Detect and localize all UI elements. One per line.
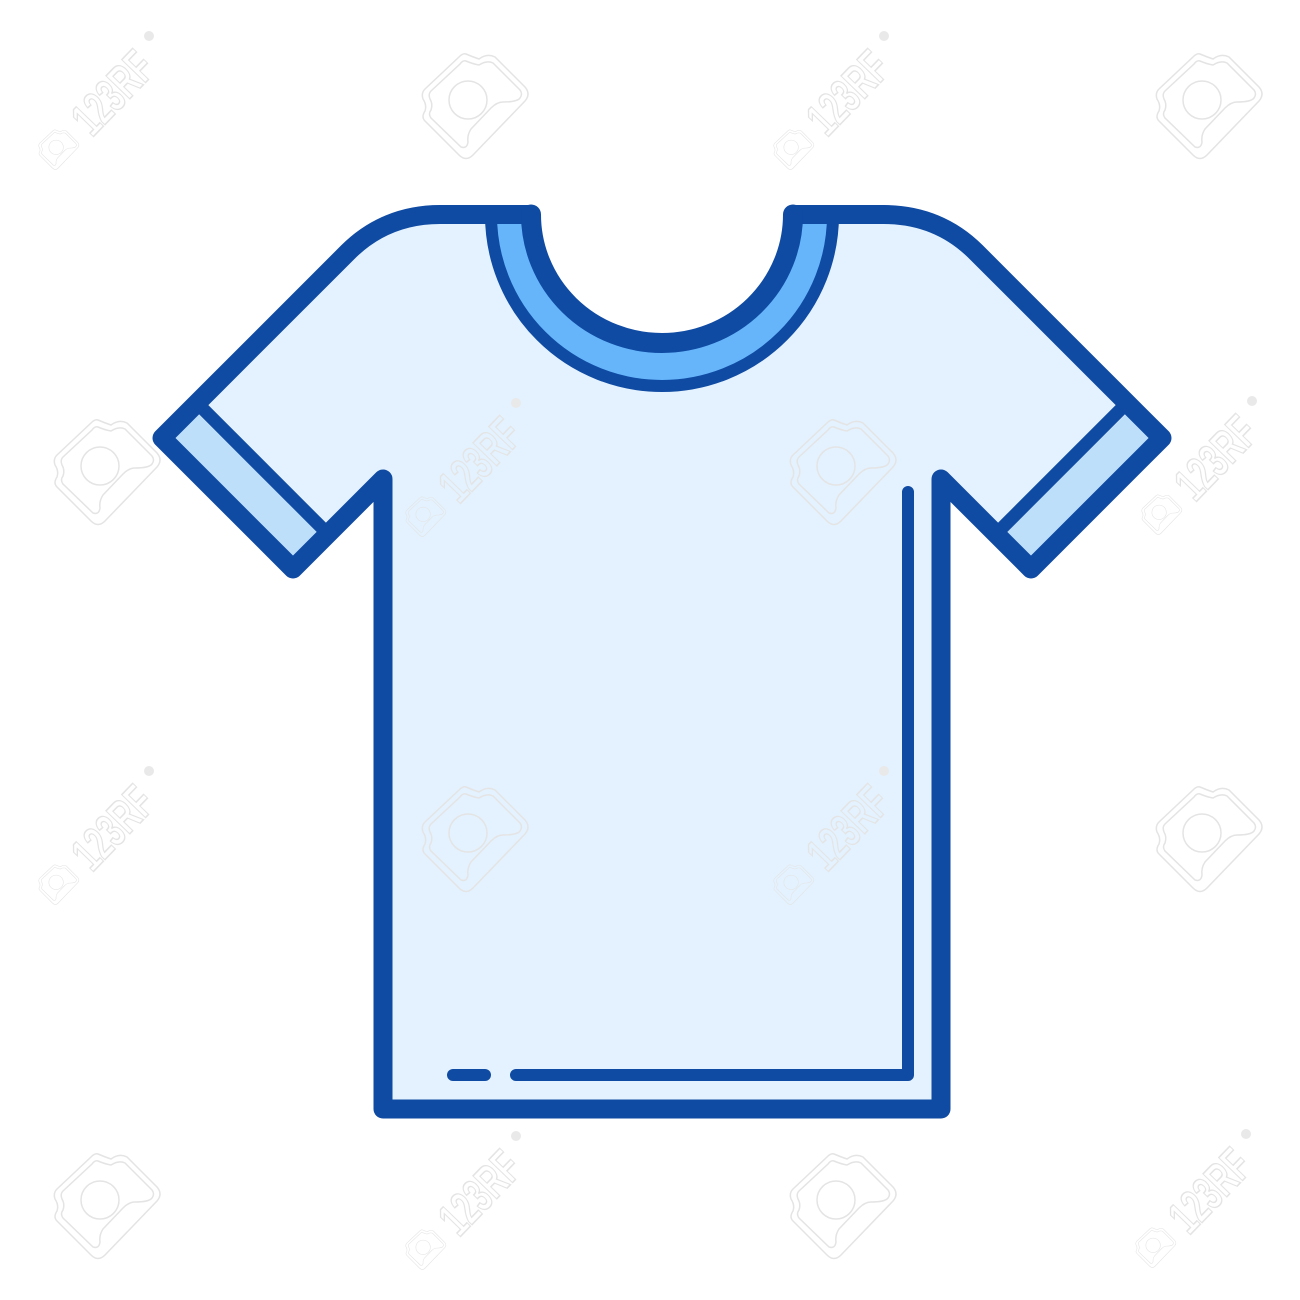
watermark logo row 3 right: 123RF [797, 776, 900, 881]
short hem dash [453, 1069, 485, 1081]
watermark logo row 1 left [39, 31, 165, 170]
watermark logo row 2 left: 123RF [429, 408, 532, 513]
left cuff seam [203, 409, 324, 530]
watermark logo row 2 left [406, 398, 532, 537]
shirt body fill [162, 214, 1162, 1109]
right cuff seam [1000, 409, 1121, 530]
inner hem accent line [516, 492, 908, 1075]
watermark logo row 3 left [39, 766, 165, 905]
watermark logo row 1 right: 123RF [797, 41, 900, 146]
t-shirt icon [162, 214, 1162, 1109]
watermark logo row 4 left: 123RF [429, 1141, 532, 1246]
watermark logo row 1 right [774, 31, 900, 170]
watermark logo row 4 right [1136, 1129, 1262, 1268]
watermark logo row 4 left [406, 1131, 532, 1270]
watermark logo row 3 right [774, 766, 900, 905]
watermark logo row 1 left: 123RF [62, 41, 165, 146]
shirt outline [162, 214, 1162, 1109]
watermark logo row 2 right: 123RF [1165, 406, 1268, 511]
watermark logo row 3 left: 123RF [62, 776, 165, 881]
watermark logo row 4 right: 123RF [1159, 1139, 1262, 1244]
left sleeve cuff [162, 408, 324, 569]
neckline [531, 214, 793, 343]
watermark logo row 2 right [1142, 396, 1268, 535]
collar band [491, 215, 833, 386]
right sleeve cuff [1000, 408, 1162, 569]
